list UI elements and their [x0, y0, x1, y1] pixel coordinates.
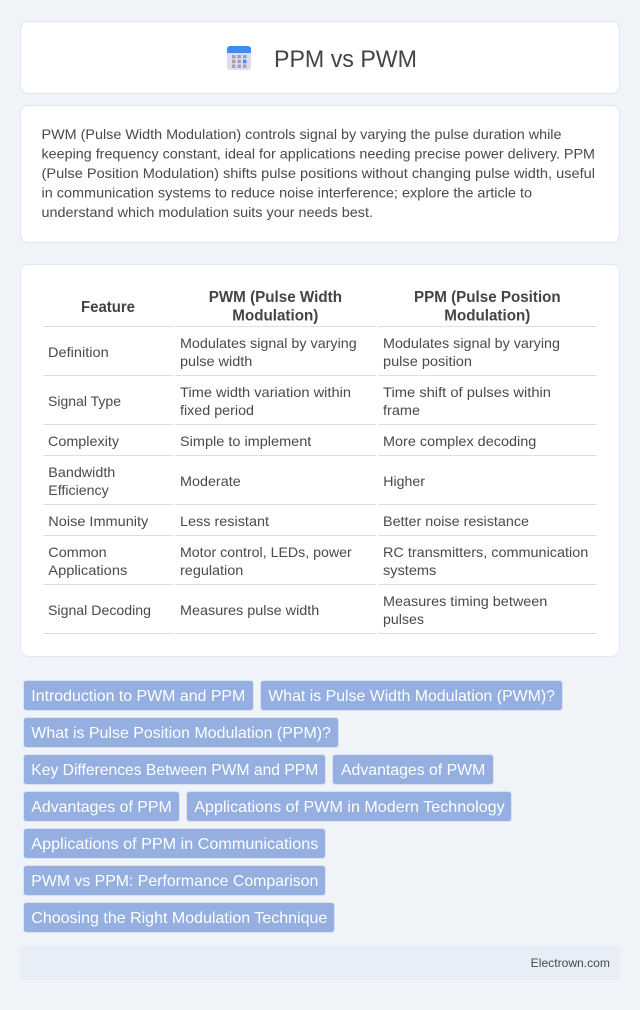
tag — [260, 680, 562, 710]
tag — [332, 754, 494, 784]
panel: summary paragraph — [20, 106, 620, 242]
row: noise immunity — [48, 513, 529, 529]
tag: Applications of PWM in Modern Technology — [194, 799, 505, 816]
footer: Electrown.com — [531, 956, 610, 970]
row: common applications: Motor control, LEDs, power — [180, 544, 352, 560]
row: bandwidth efficiency: Moderate — [180, 473, 241, 489]
panel: summary paragraph: in communication systems to reduce noise interference; explore the article to — [42, 184, 532, 200]
tag: Advantages of PWM — [341, 762, 485, 779]
tag: Choosing the Right Modulation Technique — [31, 910, 327, 927]
row: definition: Modulates signal by varying — [180, 335, 357, 351]
row: complexity: More complex decoding — [383, 433, 536, 449]
tag — [24, 902, 334, 932]
row: noise immunity: Noise Immunity — [48, 513, 148, 529]
tag — [24, 718, 338, 748]
tag: PWM vs PPM: Performance Comparison — [31, 873, 318, 890]
tag — [24, 680, 254, 710]
table header row: Modulation) — [444, 308, 530, 324]
tag: Introduction to PWM and PPM — [31, 688, 245, 705]
table header row: Feature — [81, 299, 135, 316]
row: signal decoding: pulses — [383, 611, 424, 627]
row: signal type: fixed period — [180, 402, 254, 418]
table header row — [81, 289, 561, 324]
title: PPM vs PWM — [274, 46, 417, 73]
row: noise immunity: Less resistant — [180, 513, 269, 529]
tag: Key Differences Between PWM and PPM — [31, 762, 318, 779]
row: definition: Definition — [48, 344, 109, 360]
row: bandwidth efficiency — [48, 464, 425, 498]
row: signal type: Signal Type — [48, 393, 121, 409]
table header row: PPM (Pulse Position — [414, 289, 561, 306]
tag — [24, 754, 326, 784]
row: bandwidth efficiency: Bandwidth — [48, 464, 115, 480]
row: definition — [48, 335, 560, 369]
footer — [20, 946, 620, 980]
row: common applications: regulation — [180, 562, 243, 578]
tag — [24, 866, 326, 896]
row: complexity: Simple to implement — [180, 433, 311, 449]
row: common applications: Applications — [48, 562, 127, 578]
row: bandwidth efficiency: Efficiency — [48, 482, 109, 498]
row: complexity — [48, 433, 536, 449]
topic tags — [24, 680, 562, 932]
row: common applications: Common — [48, 544, 107, 560]
tag — [186, 792, 512, 822]
tag — [24, 792, 180, 822]
row: signal type — [48, 384, 551, 418]
row: signal type: Time shift of pulses within — [383, 384, 551, 400]
panel: summary paragraph: (Pulse Position Modulation) shifts pulse positions without changing pulse width, useful — [42, 165, 595, 181]
row: signal decoding: Signal Decoding — [48, 602, 151, 618]
row: bandwidth efficiency: Higher — [383, 473, 425, 489]
row: common applications: RC transmitters, communication — [383, 544, 588, 560]
panel: summary paragraph: understand which modulation suits your needs best. — [42, 204, 373, 220]
panel: summary paragraph: keeping frequency constant, ideal for applications needing precise power delivery. PPM — [42, 146, 595, 162]
tag: Advantages of PPM — [31, 799, 172, 816]
row: signal decoding — [48, 593, 547, 627]
table header row: PWM (Pulse Width — [209, 289, 342, 306]
row: complexity: Complexity — [48, 433, 119, 449]
tag: What is Pulse Position Modulation (PPM)? — [31, 725, 331, 742]
row: signal type: frame — [383, 402, 420, 418]
tag — [24, 828, 326, 858]
row: common applications: systems — [383, 562, 436, 578]
tag: Applications of PPM in Communications — [31, 836, 318, 853]
row: noise immunity: Better noise resistance — [383, 513, 529, 529]
header panel — [20, 22, 620, 94]
row: common applications — [48, 544, 588, 578]
row: signal decoding: Measures timing between — [383, 593, 547, 609]
row: definition: pulse width — [180, 353, 252, 369]
row: definition: Modulates signal by varying — [383, 335, 560, 351]
panel: summary paragraph: PWM (Pulse Width Modulation) controls signal by varying the pulse duration while — [42, 126, 562, 142]
table header row: Modulation) — [232, 308, 318, 324]
row: definition: pulse position — [383, 353, 472, 369]
row: signal decoding: Measures pulse width — [180, 602, 319, 618]
row: signal type: Time width variation within — [180, 384, 351, 400]
icon: calendar — [227, 46, 251, 70]
panel: comparison table — [20, 264, 620, 656]
tag: What is Pulse Width Modulation (PWM)? — [268, 688, 555, 705]
